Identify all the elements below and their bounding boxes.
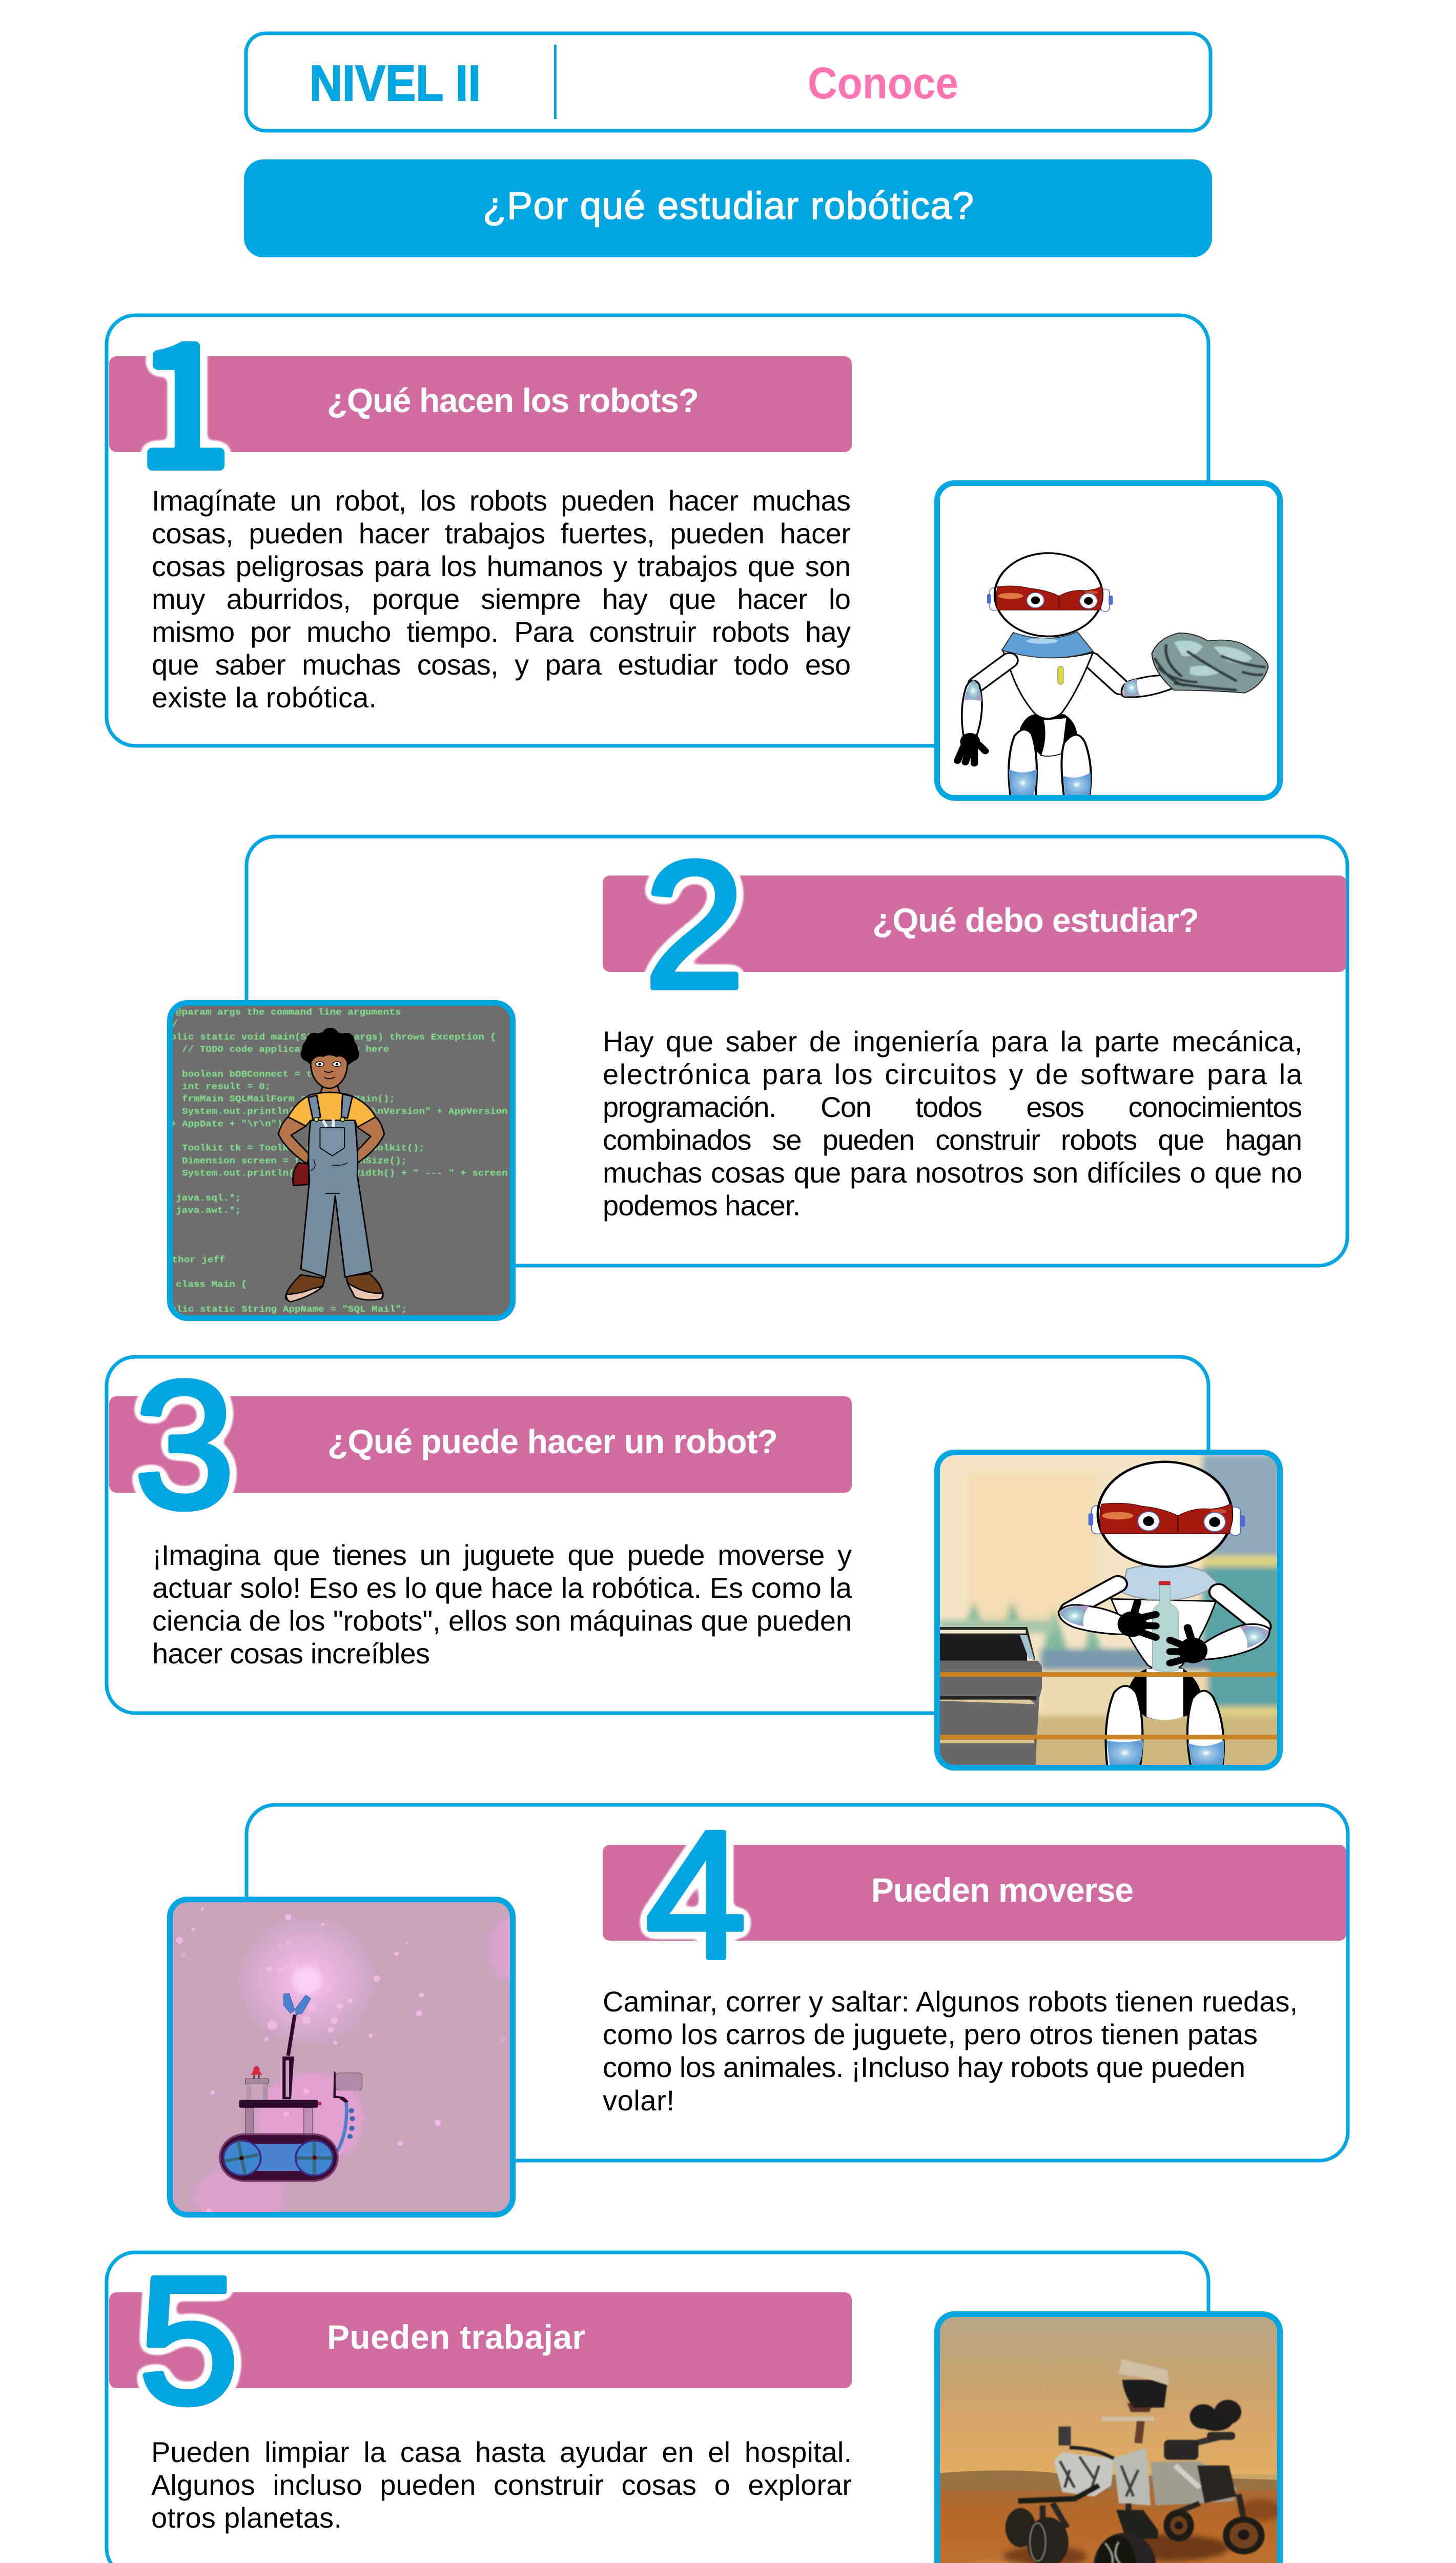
body text 2: muchas cosas que para nosotros son difíciles o que no xyxy=(603,1156,1302,1189)
body text 2: Hay que saber de ingeniería para la parte mecánica, xyxy=(603,1025,1302,1057)
source code background: boolean bDBConnect = true; xyxy=(182,1069,336,1080)
body text 4: volar! xyxy=(603,2084,674,2117)
image frame 5 xyxy=(937,2314,1280,2563)
image: robot holding a rock xyxy=(937,483,1280,798)
body text 5: Pueden limpiar la casa hasta ayudar en el hospital. xyxy=(151,2436,852,2468)
body text 1: muy aburridos, porque siempre hay que hacer lo xyxy=(152,583,851,615)
body text 2: electrónica para los circuitos y de software para la xyxy=(603,1058,1303,1090)
boy figure xyxy=(278,1028,384,1301)
rover xyxy=(334,2102,346,2157)
body text 1: Imagínate un robot, los robots pueden hacer muchas xyxy=(152,484,851,517)
image frame 2 xyxy=(170,1003,512,1318)
source code background: / xyxy=(172,1019,178,1029)
body text 3 xyxy=(152,1539,852,1670)
image: boy in overalls over code xyxy=(167,1000,516,1321)
source code background: System.out.println(AppName + "\r\nVersion" + AppVersion xyxy=(182,1106,508,1117)
source code background: + AppDate + "\r\n"); xyxy=(170,1118,289,1129)
body text 5: otros planetas. xyxy=(151,2501,342,2534)
image: tracked rover with sparkles xyxy=(170,1899,524,2226)
heading bar 3 xyxy=(109,1396,852,1493)
image frame 4 xyxy=(170,1900,512,2214)
heading bar 4 xyxy=(603,1845,1346,1941)
title banner: ¿Por qué estudiar robótica? xyxy=(483,184,974,227)
panel 2: Qué debo estudiar xyxy=(134,824,1347,1318)
body text 1: cosas peligrosas para los humanos y trabajos que son xyxy=(152,550,851,582)
body text 4: Caminar, correr y saltar: Algunos robots tienen ruedas, xyxy=(603,1985,1298,2018)
number 2: 2 xyxy=(644,824,745,1027)
source code background: public class Main { xyxy=(134,1279,247,1290)
bottle xyxy=(1159,1581,1171,1585)
body text 3: ¡Imagina que tienes un juguete que puede moverse y xyxy=(152,1539,852,1571)
source code background: // TODO code application logic here xyxy=(182,1044,389,1055)
body text 1: que saber muchas cosas, y para estudiar todo eso xyxy=(152,648,851,681)
heading bar 1: ¿Qué hacen los robots? xyxy=(327,381,699,419)
heading bar 2 xyxy=(603,876,1346,972)
body text 3: ciencia de los "robots", ellos son máquinas que pueden xyxy=(152,1604,852,1637)
panel 3: Qué puede hacer un robot xyxy=(107,1344,1289,1771)
body text 1 xyxy=(152,484,851,714)
body text 1: cosas, pueden hacer trabajos fuertes, pueden hacer xyxy=(152,517,851,550)
source code background: Toolkit tk = Toolkit.getDefaultToolkit(); xyxy=(182,1143,425,1153)
stage label: Conoce xyxy=(808,58,958,108)
heading bar 3: ¿Qué puede hacer un robot? xyxy=(327,1422,778,1460)
heading bar 5: Pueden trabajar xyxy=(327,2318,585,2356)
image: robot holding a bottle in a shop xyxy=(923,1452,1289,1771)
source code background: @param args the command line arguments xyxy=(176,1007,401,1018)
title banner xyxy=(244,159,1212,257)
body text 1: mismo por mucho tiempo. Para construir robots hay xyxy=(152,616,851,648)
body text 4: como los animales. ¡Incluso hay robots que pueden xyxy=(603,2051,1245,2083)
rails xyxy=(939,1672,1278,1677)
hands xyxy=(1132,1602,1194,1663)
panel 4: Pueden moverse xyxy=(170,1794,1348,2226)
source code background: frmMain SQLMailForm = new frmMain(); xyxy=(182,1093,395,1104)
source code background: import java.sql.*; xyxy=(134,1193,241,1204)
body text 5: Algunos incluso pueden construir cosas o explorar xyxy=(151,2469,852,2501)
heading bar 2: ¿Qué debo estudiar? xyxy=(872,901,1199,939)
body text 2 xyxy=(603,1025,1303,1222)
image frame 1 xyxy=(937,483,1280,798)
body text 2: combinados se pueden construir robots que hagan xyxy=(603,1124,1302,1156)
rover body xyxy=(1054,2452,1114,2496)
level label: NIVEL II xyxy=(310,55,481,111)
source code background: Dimension screen = tk.getScreenSize(); xyxy=(182,1155,407,1166)
image: Mars rover xyxy=(937,2314,1283,2563)
body text 2: programación. Con todos esos conocimientos xyxy=(603,1091,1302,1123)
source code background: int result = 0; xyxy=(182,1081,271,1092)
image frame 3 xyxy=(937,1453,1280,1767)
body text 5 xyxy=(151,2436,852,2534)
source code background: import java.awt.*; xyxy=(134,1205,241,1216)
number 4: 4 xyxy=(645,1794,747,1997)
source code background: @author jeff xyxy=(154,1254,225,1265)
body text 3: actuar solo! Eso es lo que hace la robótica. Es como la xyxy=(152,1572,852,1604)
body text 1: existe la robótica. xyxy=(152,681,377,714)
heading bar 5 xyxy=(109,2292,852,2388)
source code background: System.out.println(screen.getWidth() + " --- " + screen.getHeight()); xyxy=(182,1168,591,1179)
body text 3: hacer cosas increíbles xyxy=(152,1637,430,1670)
panel 5: Pueden trabajar xyxy=(107,2239,1283,2563)
panel 1: Qué hacen los robots xyxy=(107,272,1280,798)
body text 4 xyxy=(603,1985,1298,2117)
source code background: public static String AppName = "SQL Mail"; xyxy=(158,1304,407,1315)
heading bar 4: Pueden moverse xyxy=(871,1871,1134,1909)
body text 2: podemos hacer. xyxy=(603,1189,801,1222)
wheels xyxy=(1006,2508,1036,2547)
number 3: 3 xyxy=(134,1344,235,1547)
number 1: 1 xyxy=(138,272,230,514)
source code background xyxy=(173,1008,510,1314)
number 5: 5 xyxy=(138,2239,239,2442)
heading bar 1 xyxy=(109,356,852,452)
robot body xyxy=(1130,1667,1201,1720)
source code background: public static void main(String[] args) throws Exception { xyxy=(158,1032,496,1043)
body text 4: como los carros de juguete, pero otros tienen patas xyxy=(603,2018,1258,2050)
header box: level and stage xyxy=(246,33,1211,131)
